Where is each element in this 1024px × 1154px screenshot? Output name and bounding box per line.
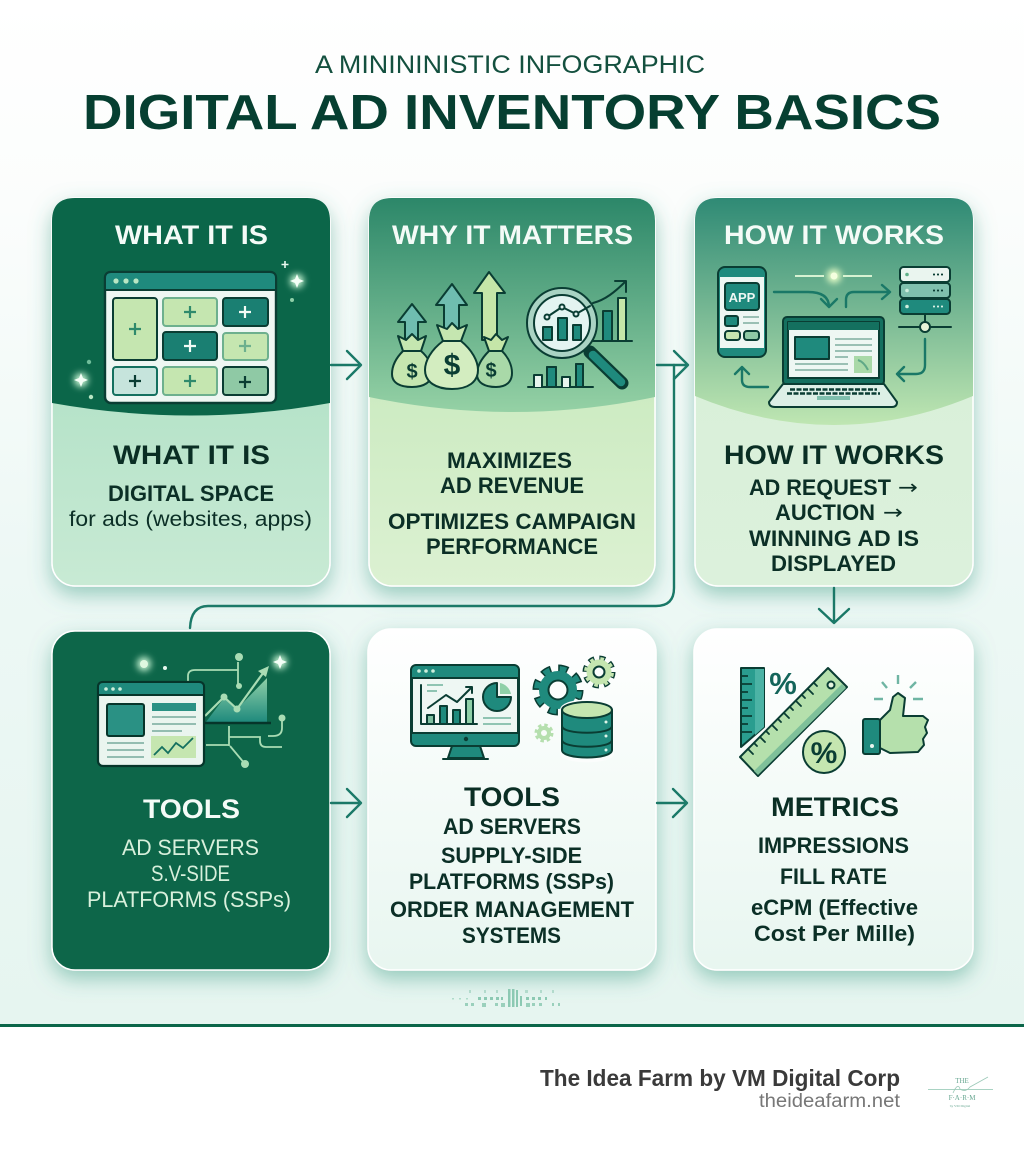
text block: AD SERVERS (122, 835, 259, 860)
card background (52, 198, 330, 586)
card header band (52, 198, 330, 416)
arrow: what it is to why it matters (331, 351, 361, 379)
arrow: connector from how it works back to tools (190, 365, 674, 628)
card header band (369, 198, 655, 412)
text block: FILL RATE (780, 864, 887, 889)
footer brand text (540, 1065, 901, 1112)
text block: eCPM (Effective (751, 895, 918, 920)
panel: what it is (52, 198, 330, 586)
icon: ad slot browser window (105, 272, 276, 403)
text block: PLATFORMS (SSPs) (409, 869, 614, 894)
text block: → (883, 500, 903, 524)
card background (694, 629, 973, 970)
panel: why it matters (369, 198, 655, 586)
footer logo (928, 1077, 993, 1108)
text block: SUPPLY-SIDE (441, 843, 582, 868)
text block: DIGITAL SPACE (108, 481, 274, 506)
text block: MAXIMIZES (447, 448, 572, 473)
panel: tools light (368, 629, 656, 970)
icon: server stack (899, 267, 951, 332)
text block: WHAT IT IS (113, 440, 270, 470)
icon: money bags with rising arrows: $ (406, 361, 418, 383)
footer brand text: theideafarm.net (759, 1091, 901, 1112)
card background (52, 631, 330, 970)
subtitle: A MINININISTIC INFOGRAPHIC (315, 51, 705, 79)
icon: sparkles (74, 261, 304, 399)
icon: glowing signal (795, 269, 872, 283)
icon: dashboard monitor (411, 665, 519, 759)
footer band (0, 1024, 1024, 1154)
icon: rulers and percent: % (811, 737, 837, 770)
text block: WINNING AD IS (749, 526, 919, 551)
text block (388, 448, 636, 559)
text block: → (898, 475, 918, 499)
heading: TOOLS (143, 794, 240, 824)
icon: money bags with rising arrows (392, 272, 512, 389)
panel: how it works (695, 198, 973, 586)
heading: WHAT IT IS (115, 220, 268, 250)
text block: PLATFORMS (SSPs) (87, 887, 291, 912)
heading: HOW IT WORKS (724, 220, 944, 250)
icon: rulers and percent: % (769, 666, 797, 701)
icon: money bags with rising arrows: $ (444, 349, 461, 382)
panel: metrics (694, 629, 973, 970)
text block (751, 792, 918, 946)
text block: ORDER MANAGEMENT (390, 897, 635, 922)
text block: for ads (websites, apps) (69, 508, 312, 531)
card background (695, 198, 973, 586)
text block: METRICS (771, 792, 899, 822)
icon: phone with app: APP (729, 290, 756, 305)
icon: magnifier over charts (527, 281, 632, 387)
text block: OPTIMIZES CAMPAIGN (388, 509, 636, 534)
text block: Cost Per Mille) (754, 921, 915, 946)
arrow: why it matters to how it works (657, 351, 688, 379)
text block: AD REQUEST (749, 475, 892, 500)
text block (724, 440, 944, 576)
arrows: ad request flow (735, 285, 925, 387)
text block: HOW IT WORKS (724, 440, 944, 470)
text block: AD REVENUE (440, 473, 584, 498)
arrow: tools to tools detail (331, 789, 361, 817)
panel: tools dark (52, 631, 330, 970)
text block (87, 835, 291, 912)
text block: PERFORMANCE (426, 534, 598, 559)
heading: WHY IT MATTERS (392, 220, 633, 250)
icon: sparkles (137, 655, 287, 671)
title: DIGITAL AD INVENTORY BASICS (83, 86, 941, 140)
arrow: tools detail to metrics (657, 789, 687, 817)
footer logo: THE (955, 1077, 969, 1085)
icon: phone with app (718, 267, 766, 357)
text block (69, 440, 312, 531)
icon: gears (537, 659, 612, 740)
text block: DISPLAYED (771, 551, 896, 576)
arrow: how it works to metrics (819, 588, 849, 623)
text block: IMPRESSIONS (758, 833, 909, 858)
text block: S.V-SIDE (151, 861, 230, 886)
footer logo: F·A·R·M (949, 1094, 976, 1102)
decorative equalizer dots (452, 989, 560, 1007)
icon: circuit lines and growth chart (188, 653, 286, 768)
text block: AD SERVERS (443, 814, 581, 839)
card header band (695, 198, 973, 425)
card background (369, 198, 655, 586)
icon: money bags with rising arrows: $ (485, 360, 497, 382)
card background (368, 629, 656, 970)
text block (390, 782, 635, 948)
text block: SYSTEMS (462, 923, 561, 948)
icon: browser window (98, 682, 204, 766)
icon: thumbs up (863, 675, 928, 754)
text block: AUCTION (775, 500, 875, 525)
icon: laptop showing ad (769, 317, 897, 407)
text block: TOOLS (464, 782, 560, 812)
footer logo: by VM Digital (950, 1104, 970, 1108)
icon: rulers and percent (740, 666, 847, 776)
icon: database (560, 700, 614, 762)
footer brand text: The Idea Farm by VM Digital Corp (540, 1065, 900, 1091)
